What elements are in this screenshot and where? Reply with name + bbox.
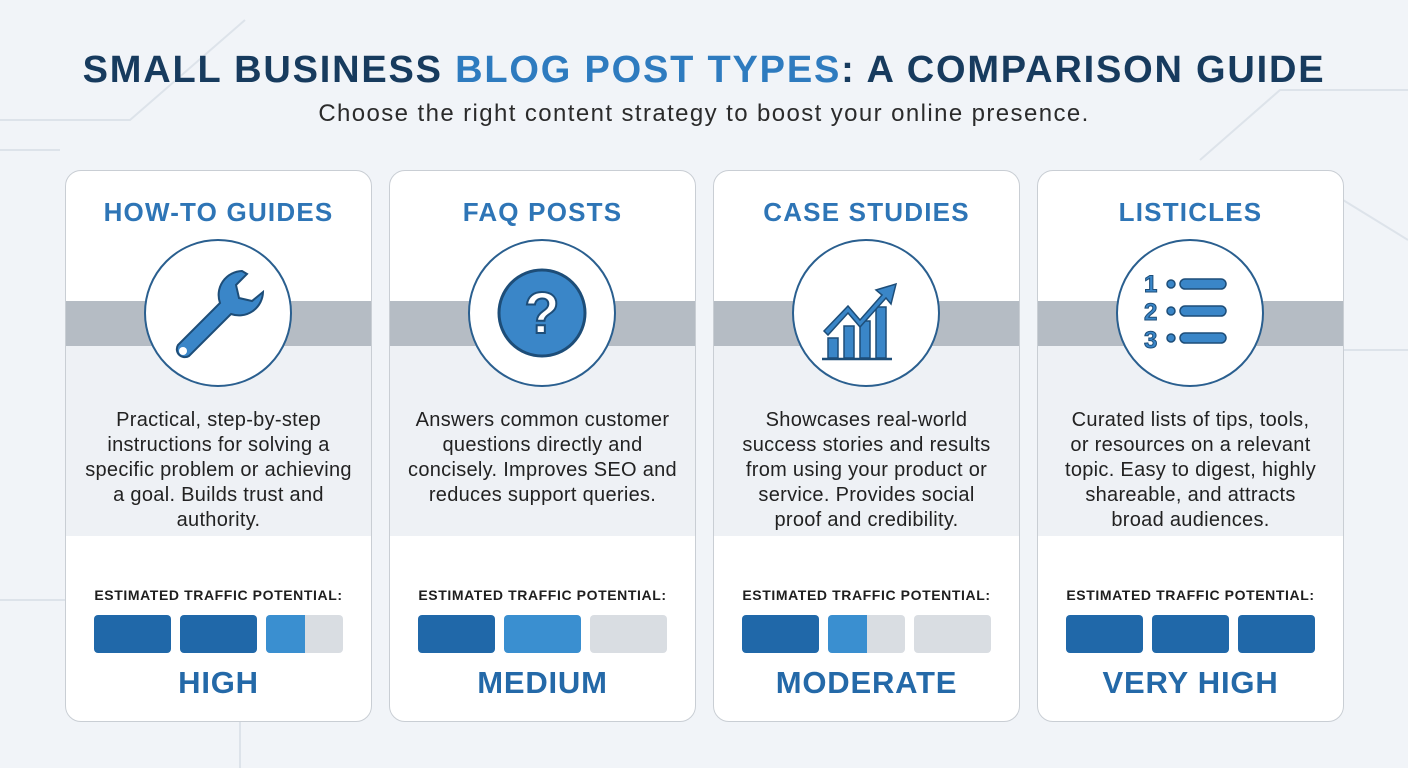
icon: numbered list — [1116, 239, 1264, 387]
description: success stories and results — [742, 434, 991, 456]
heading: HOW-TO GUIDES — [104, 197, 333, 227]
bar: moderate — [742, 615, 991, 653]
description: topic. Easy to digest, highly — [1065, 459, 1316, 481]
description: proof and credibility. — [774, 509, 959, 531]
icon: chart — [792, 239, 940, 387]
description — [85, 409, 352, 531]
title: SMALL BUSINESS BLOG POST TYPES: A COMPARISON GUIDE — [83, 49, 1325, 91]
description: instructions for solving a — [107, 434, 330, 456]
description: shareable, and attracts — [1085, 484, 1296, 506]
description: authority. — [177, 509, 260, 531]
panel: faq posts — [389, 170, 696, 722]
description — [1065, 409, 1316, 531]
icon: question — [468, 239, 616, 387]
description: from using your product or — [746, 459, 987, 481]
heading: FAQ POSTS — [463, 197, 622, 227]
description: a goal. Builds trust and — [113, 484, 324, 506]
description: Practical, step-by-step — [116, 409, 321, 431]
icon: numbered list: 3 — [1144, 327, 1157, 354]
description — [742, 409, 991, 531]
heading: CASE STUDIES — [763, 197, 970, 227]
description: specific problem or achieving — [85, 459, 352, 481]
bar: high — [94, 615, 343, 653]
panel: how-to guides — [65, 170, 372, 722]
description: concisely. Improves SEO and — [408, 459, 677, 481]
label: ESTIMATED TRAFFIC POTENTIAL: — [742, 587, 991, 603]
description: service. Provides social — [758, 484, 975, 506]
panel: case studies — [713, 170, 1020, 722]
icon: numbered list: 1 — [1144, 271, 1157, 298]
value: MEDIUM — [477, 665, 608, 700]
icon: question: ? — [524, 281, 560, 346]
subtitle: Choose the right content strategy to boost your online presence. — [318, 100, 1090, 127]
description: broad audiences. — [1111, 509, 1270, 531]
icon: wrench — [144, 239, 292, 387]
label: ESTIMATED TRAFFIC POTENTIAL: — [418, 587, 667, 603]
description: Showcases real-world — [766, 409, 967, 431]
description: Curated lists of tips, tools, — [1072, 409, 1309, 431]
icon: numbered list: 2 — [1144, 299, 1157, 326]
description: reduces support queries. — [429, 484, 656, 506]
value: MODERATE — [776, 665, 957, 700]
heading: LISTICLES — [1119, 197, 1262, 227]
description: or resources on a relevant — [1070, 434, 1311, 456]
value: HIGH — [178, 665, 259, 700]
bar: medium — [418, 615, 667, 653]
description: questions directly and — [442, 434, 643, 456]
description — [408, 409, 677, 506]
description: Answers common customer — [416, 409, 669, 431]
label: ESTIMATED TRAFFIC POTENTIAL: — [94, 587, 343, 603]
value: VERY HIGH — [1102, 665, 1279, 700]
panel: listicles — [1037, 170, 1344, 722]
bar: very high — [1066, 615, 1315, 653]
label: ESTIMATED TRAFFIC POTENTIAL: — [1066, 587, 1315, 603]
